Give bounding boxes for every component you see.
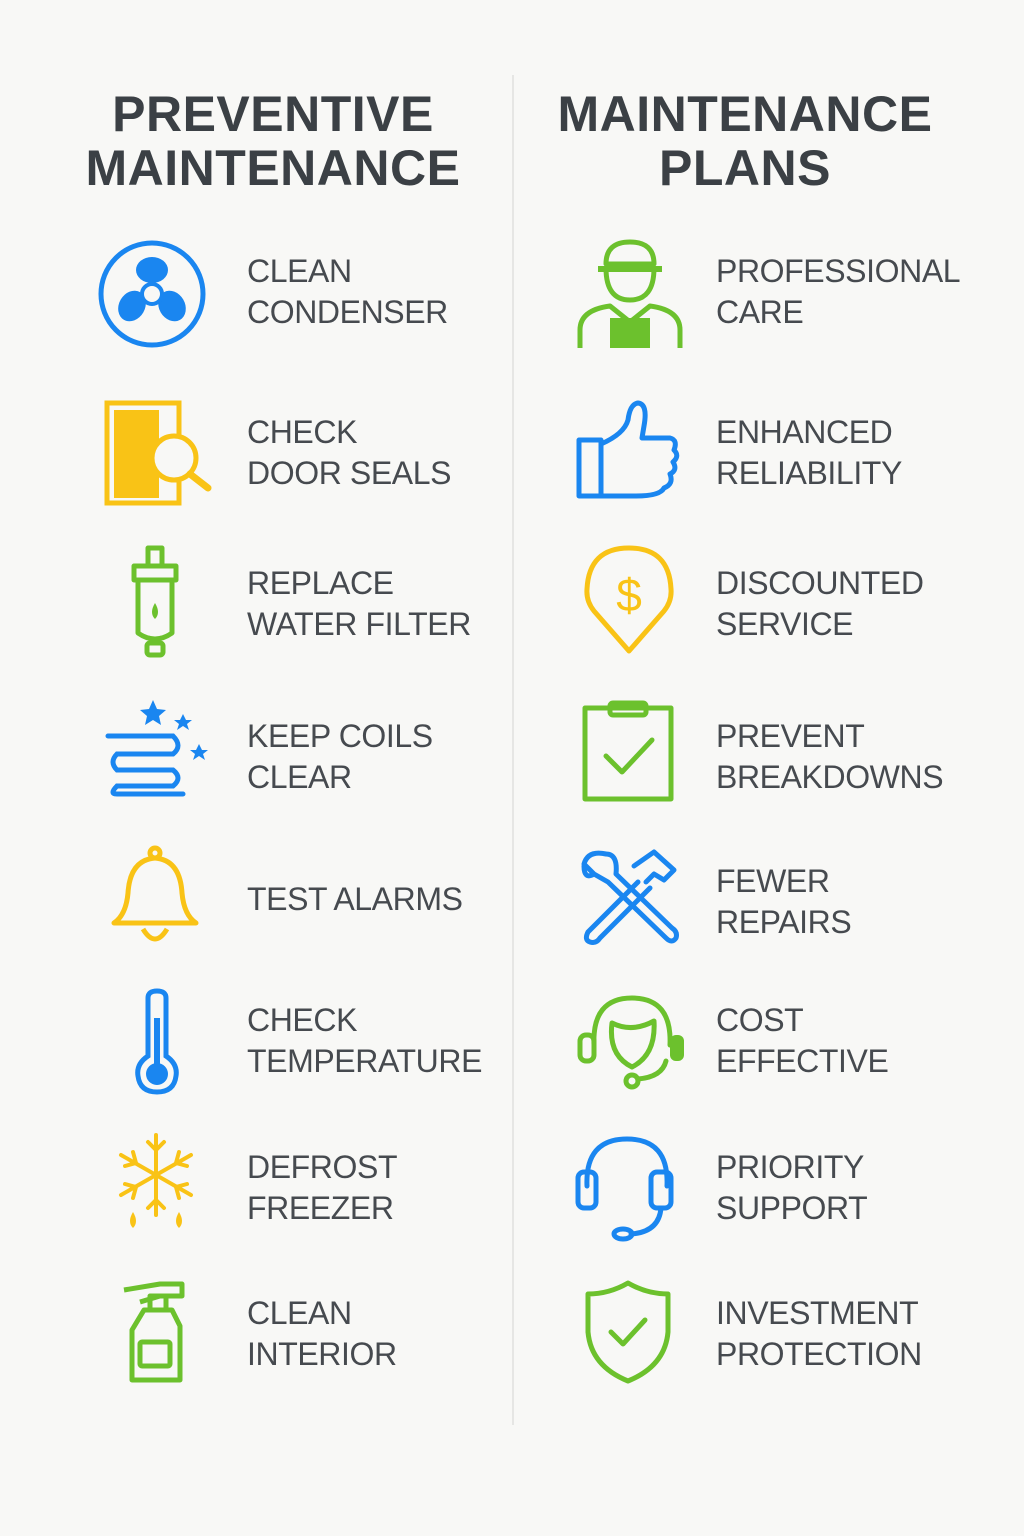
icon: coils with stars [106, 700, 208, 796]
icon: fan [98, 240, 206, 348]
label: keep coils clear [247, 718, 433, 795]
label: cost effective: COST [716, 1002, 803, 1038]
label: enhanced reliability: RELIABILITY [716, 455, 902, 491]
icon: wrench and hammer [582, 849, 679, 945]
label: cost effective [716, 1002, 888, 1079]
icon: shield check [586, 1280, 670, 1384]
label: fewer repairs: FEWER [716, 863, 830, 899]
label: check temperature: TEMPERATURE [247, 1043, 482, 1079]
label: discounted service: SERVICE [716, 606, 853, 642]
label: cost effective: EFFECTIVE [716, 1043, 888, 1079]
label: fewer repairs: REPAIRS [716, 904, 851, 940]
icon: water filter [132, 546, 178, 658]
label: check temperature [247, 1002, 482, 1079]
label: prevent breakdowns: BREAKDOWNS [716, 759, 943, 795]
label: keep coils clear: CLEAR [247, 759, 352, 795]
label: defrost freezer: FREEZER [247, 1190, 394, 1226]
label: fewer repairs [716, 863, 851, 940]
label: defrost freezer: DEFROST [247, 1149, 397, 1185]
icon: technician [578, 240, 682, 348]
label: keep coils clear: KEEP COILS [247, 718, 433, 754]
label: check temperature: CHECK [247, 1002, 357, 1038]
label: discounted service: DISCOUNTED [716, 565, 924, 601]
label: priority support [716, 1149, 867, 1226]
label: check door seals: CHECK [247, 414, 357, 450]
icon: clipboard check [582, 700, 674, 802]
label: clean interior: INTERIOR [247, 1336, 397, 1372]
label: check door seals [247, 414, 451, 491]
label: replace water filter: REPLACE [247, 565, 394, 601]
label: prevent breakdowns: PREVENT [716, 718, 864, 754]
label: prevent breakdowns [716, 718, 943, 795]
label: check door seals: DOOR SEALS [247, 455, 451, 491]
label: clean interior [247, 1295, 397, 1372]
label: enhanced reliability [716, 414, 902, 491]
icon: headphones [576, 1136, 674, 1242]
label: replace water filter [247, 565, 471, 642]
icon: bell [112, 846, 198, 942]
title: preventive maintenance: PREVENTIVE [112, 86, 434, 142]
icon: dollar pin: $ [616, 569, 642, 621]
label: investment protection [716, 1295, 922, 1372]
label: clean interior: CLEAN [247, 1295, 352, 1331]
icon: thumbs up [576, 400, 680, 498]
icon: thermometer [135, 988, 179, 1094]
icon: snowflake [118, 1133, 194, 1228]
label: professional care: PROFESSIONAL [716, 253, 960, 289]
icon: headset agent [578, 996, 684, 1090]
label: enhanced reliability: ENHANCED [716, 414, 892, 450]
label: clean condenser: CLEAN [247, 253, 352, 289]
title: preventive maintenance [86, 86, 460, 196]
icon: door seal check [104, 400, 212, 506]
label: test alarms: TEST ALARMS [247, 881, 463, 917]
label: investment protection: PROTECTION [716, 1336, 922, 1372]
label: professional care: CARE [716, 294, 803, 330]
title: preventive maintenance: MAINTENANCE [86, 140, 460, 196]
label: clean condenser [247, 253, 448, 330]
label: replace water filter: WATER FILTER [247, 606, 471, 642]
title: maintenance plans: PLANS [659, 140, 831, 196]
label: priority support: PRIORITY [716, 1149, 864, 1185]
label: discounted service [716, 565, 924, 642]
label: priority support: SUPPORT [716, 1190, 867, 1226]
label: professional care [716, 253, 960, 330]
label: clean condenser: CONDENSER [247, 294, 448, 330]
label: defrost freezer [247, 1149, 397, 1226]
icon: spray bottle [124, 1282, 184, 1382]
icon: dollar pin [584, 546, 674, 654]
label: investment protection: INVESTMENT [716, 1295, 918, 1331]
title: maintenance plans: MAINTENANCE [558, 86, 932, 142]
title: maintenance plans [558, 86, 932, 196]
